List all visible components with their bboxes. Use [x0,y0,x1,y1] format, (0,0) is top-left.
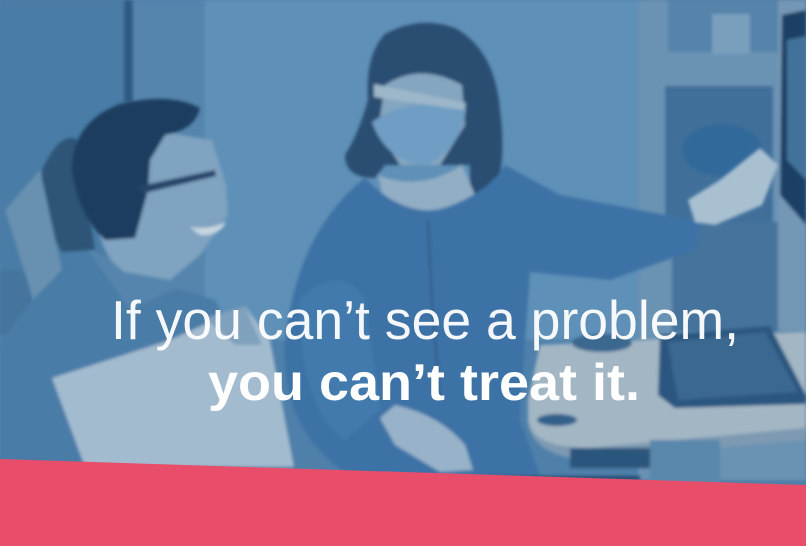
desk and keyboard [528,326,806,484]
headline line 2: you can’t treat it. [208,354,640,412]
red footer band [0,459,806,546]
patient [0,99,300,480]
patient chair [5,138,95,305]
wall panels [0,0,640,340]
headline line 1: If you can’t see a problem, [111,289,739,351]
headline [111,289,739,412]
dentist [285,23,778,480]
cabinet and screen [638,0,806,480]
